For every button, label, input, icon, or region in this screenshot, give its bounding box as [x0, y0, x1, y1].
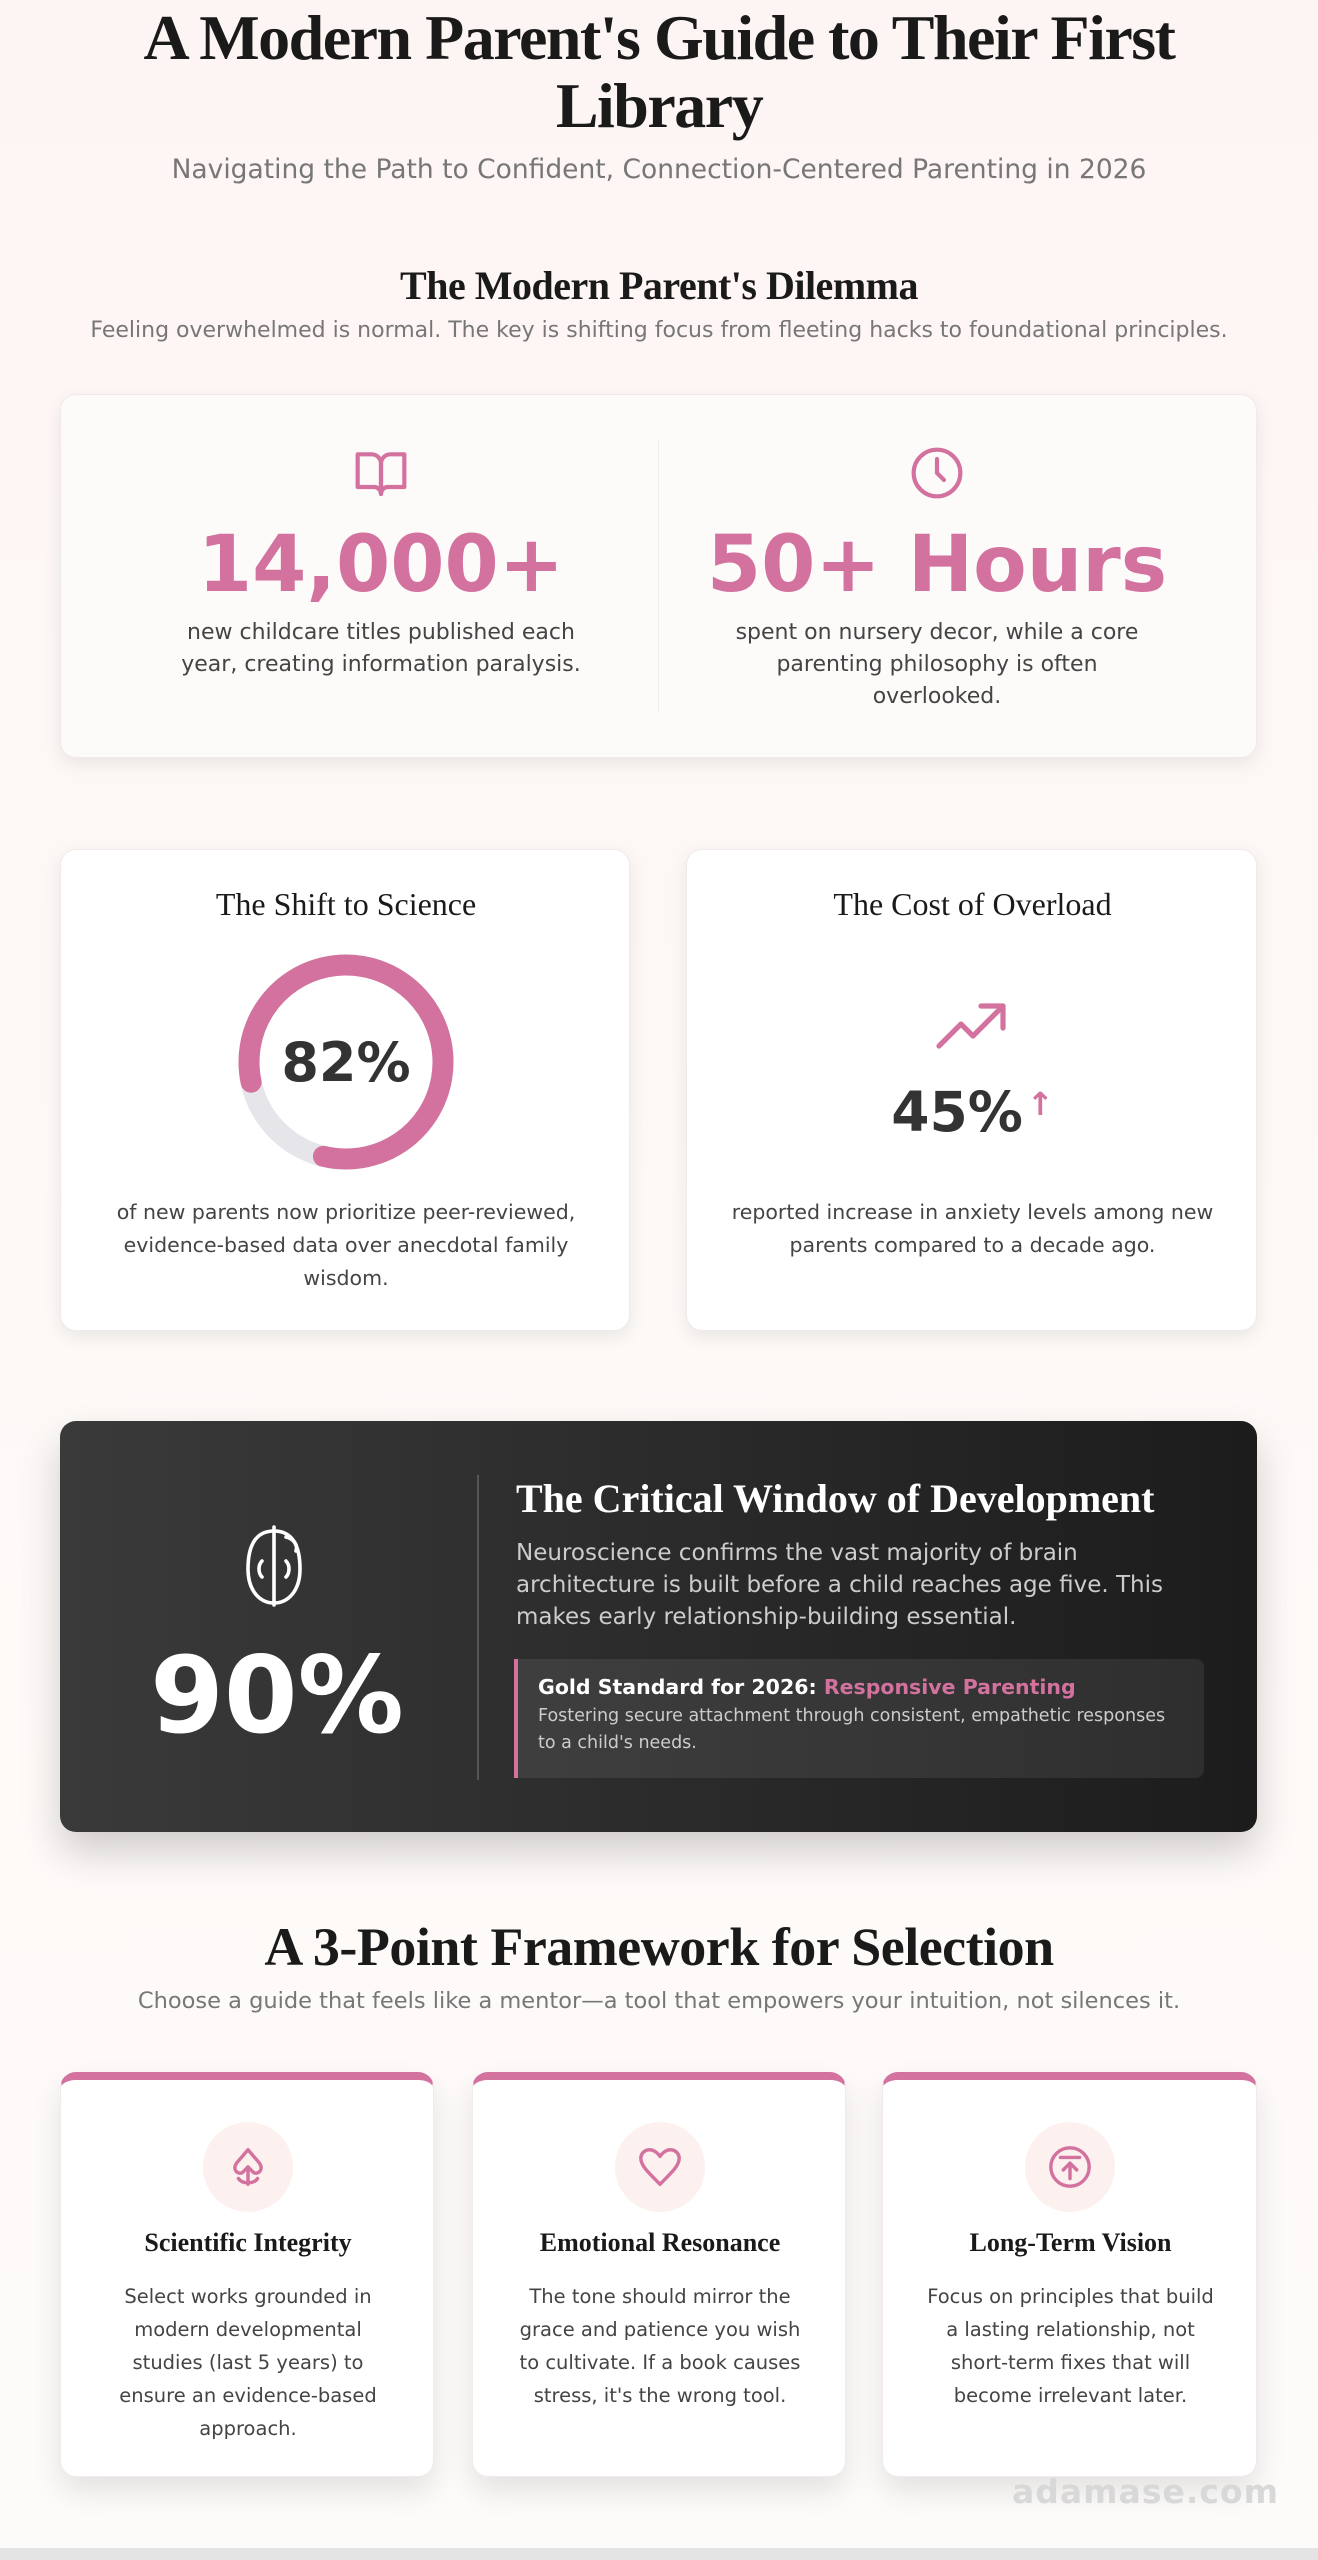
heading: Long-Term Vision: [969, 2228, 1172, 2257]
heading: The Cost of Overload: [833, 886, 1112, 922]
heading: The Critical Window of Development: [516, 1476, 1154, 1521]
donut chart: 82%: [281, 1031, 411, 1094]
title: [144, 2, 1176, 141]
stat: hours: [707, 448, 1167, 709]
vertical divider: [477, 1475, 479, 1780]
bottom bar: [0, 2548, 1318, 2560]
divider: [658, 439, 659, 713]
card: scientific integrity: [60, 2072, 434, 2477]
panel: stats: [60, 394, 1257, 758]
stat 45%: 45%↑: [891, 1080, 1054, 1144]
section heading: dilemma: The Modern Parent's Dilemma: [400, 263, 918, 308]
title: Library: [556, 70, 762, 141]
text: Focus on principles that build a lasting relationship, not short-term fixes that will become irrelevant later.: [927, 2285, 1214, 2407]
panel: cost of overload: [686, 849, 1257, 1331]
section subtext: Feeling overwhelmed is normal. The key is shifting focus from fleeting hacks to foundational principles.: [90, 318, 1228, 343]
donut chart: [238, 954, 454, 1170]
heading: Scientific Integrity: [144, 2228, 352, 2257]
panel: shift to science: [60, 849, 630, 1331]
paragraph: Neuroscience confirms the vast majority of brain architecture is built before a child reaches age five. This makes early relationship-building essential.: [516, 1540, 1163, 1630]
icon: heart: [615, 2122, 705, 2212]
icon: seedling circle: [203, 2122, 293, 2212]
icon: trend up: [936, 1003, 1006, 1049]
stat: hours: 50+ Hours: [707, 520, 1167, 610]
card: emotional resonance: [472, 2072, 846, 2477]
heading: Emotional Resonance: [540, 2228, 780, 2257]
callout: gold standard: [514, 1659, 1204, 1778]
stat 90%: 90%: [150, 1634, 404, 1757]
card: long-term vision: [882, 2072, 1257, 2477]
description: reported increase in anxiety levels among new parents compared to a decade ago.: [732, 1200, 1213, 1257]
stat: titles: new childcare titles published each year, creating information paralysis.: [181, 620, 581, 677]
heading: The Shift to Science: [216, 886, 476, 922]
text: Select works grounded in modern developmental studies (last 5 years) to ensure an evidence-based approach.: [119, 2285, 377, 2440]
description: of new parents now prioritize peer-reviewed, evidence-based data over anecdotal family wisdom.: [117, 1200, 575, 1290]
subtitle: Navigating the Path to Confident, Connection-Centered Parenting in 2026: [172, 154, 1146, 185]
text: The tone should mirror the grace and patience you wish to cultivate. If a book causes stress, it's the wrong tool.: [520, 2285, 800, 2407]
icon: book: [356, 452, 406, 496]
section heading: framework: A 3-Point Framework for Selection: [264, 1917, 1054, 1977]
framework subtext: Choose a guide that feels like a mentor—a tool that empowers your intuition, not silences it.: [138, 1988, 1180, 2014]
stat: titles: [181, 452, 581, 677]
callout: gold standard: Gold Standard for 2026: Responsive Parenting: [538, 1675, 1076, 1699]
icon: clock: [912, 448, 962, 498]
stat: titles: 14,000+: [198, 520, 564, 610]
icon: arrow circle: [1025, 2122, 1115, 2212]
watermark: adamase.com: [1012, 2472, 1279, 2511]
stat: hours: spent on nursery decor, while a core parenting philosophy is often overlooked.: [736, 620, 1138, 709]
title: A Modern Parent's Guide to Their First: [144, 2, 1174, 73]
callout: gold standard: Fostering secure attachment through consistent, empathetic responses to a child's needs.: [538, 1706, 1165, 1753]
icon: brain: [246, 1525, 302, 1607]
panel: critical window: [60, 1421, 1257, 1832]
